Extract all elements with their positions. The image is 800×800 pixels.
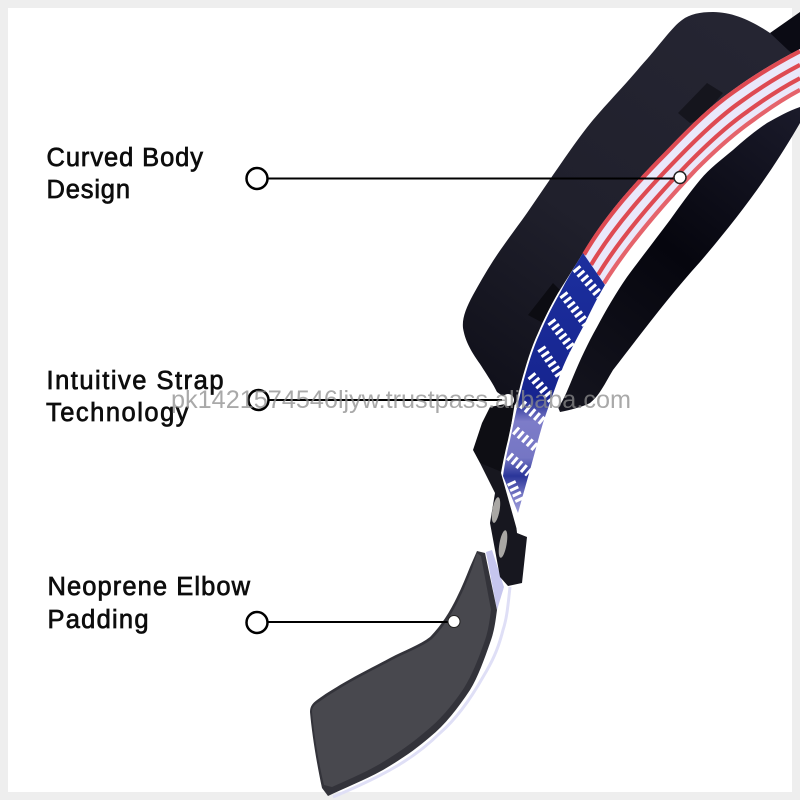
label: Curved Body Design: Design <box>46 176 130 204</box>
blue star field <box>503 253 605 513</box>
callout line: Intuitive Strap Technology <box>248 390 514 410</box>
label: Curved Body Design <box>46 144 203 204</box>
pad face highlight <box>312 553 491 787</box>
label: Neoprene Elbow Padding: Padding <box>48 606 148 634</box>
callout line: Curved Body Design <box>246 168 686 189</box>
white star rows <box>509 268 600 503</box>
pad webbing loop lower <box>528 283 562 323</box>
watermark: pk1421574546ljyw.trustpass.alibaba.com <box>171 386 631 414</box>
upper strap end <box>770 12 800 58</box>
inner black shell <box>555 100 800 412</box>
callout line: Neoprene Elbow Padding <box>246 612 460 633</box>
label: Intuitive Strap Technology <box>46 367 224 427</box>
label: Curved Body Design: Curved Body <box>46 144 203 172</box>
lower white band edge <box>333 587 510 797</box>
arm brace product illustration <box>310 12 800 797</box>
lavender connector behind tab <box>486 550 504 610</box>
snap rivet top <box>490 497 502 523</box>
black webbing strap <box>473 402 515 478</box>
pad webbing loop upper <box>678 83 723 123</box>
label: Neoprene Elbow Padding <box>48 573 251 634</box>
label: Intuitive Strap Technology: Intuitive Strap <box>46 367 224 395</box>
white flexible band <box>501 49 800 535</box>
snap rivet bottom <box>497 530 509 558</box>
lower neoprene elbow pad <box>310 551 497 796</box>
label: Neoprene Elbow Padding: Neoprene Elbow <box>48 573 251 601</box>
red stripes <box>584 51 800 283</box>
label: Intuitive Strap Technology: Technology <box>46 399 189 427</box>
curved neoprene body pad <box>463 12 800 405</box>
strap tab with snaps <box>480 463 527 586</box>
stripes ground <box>583 49 800 285</box>
